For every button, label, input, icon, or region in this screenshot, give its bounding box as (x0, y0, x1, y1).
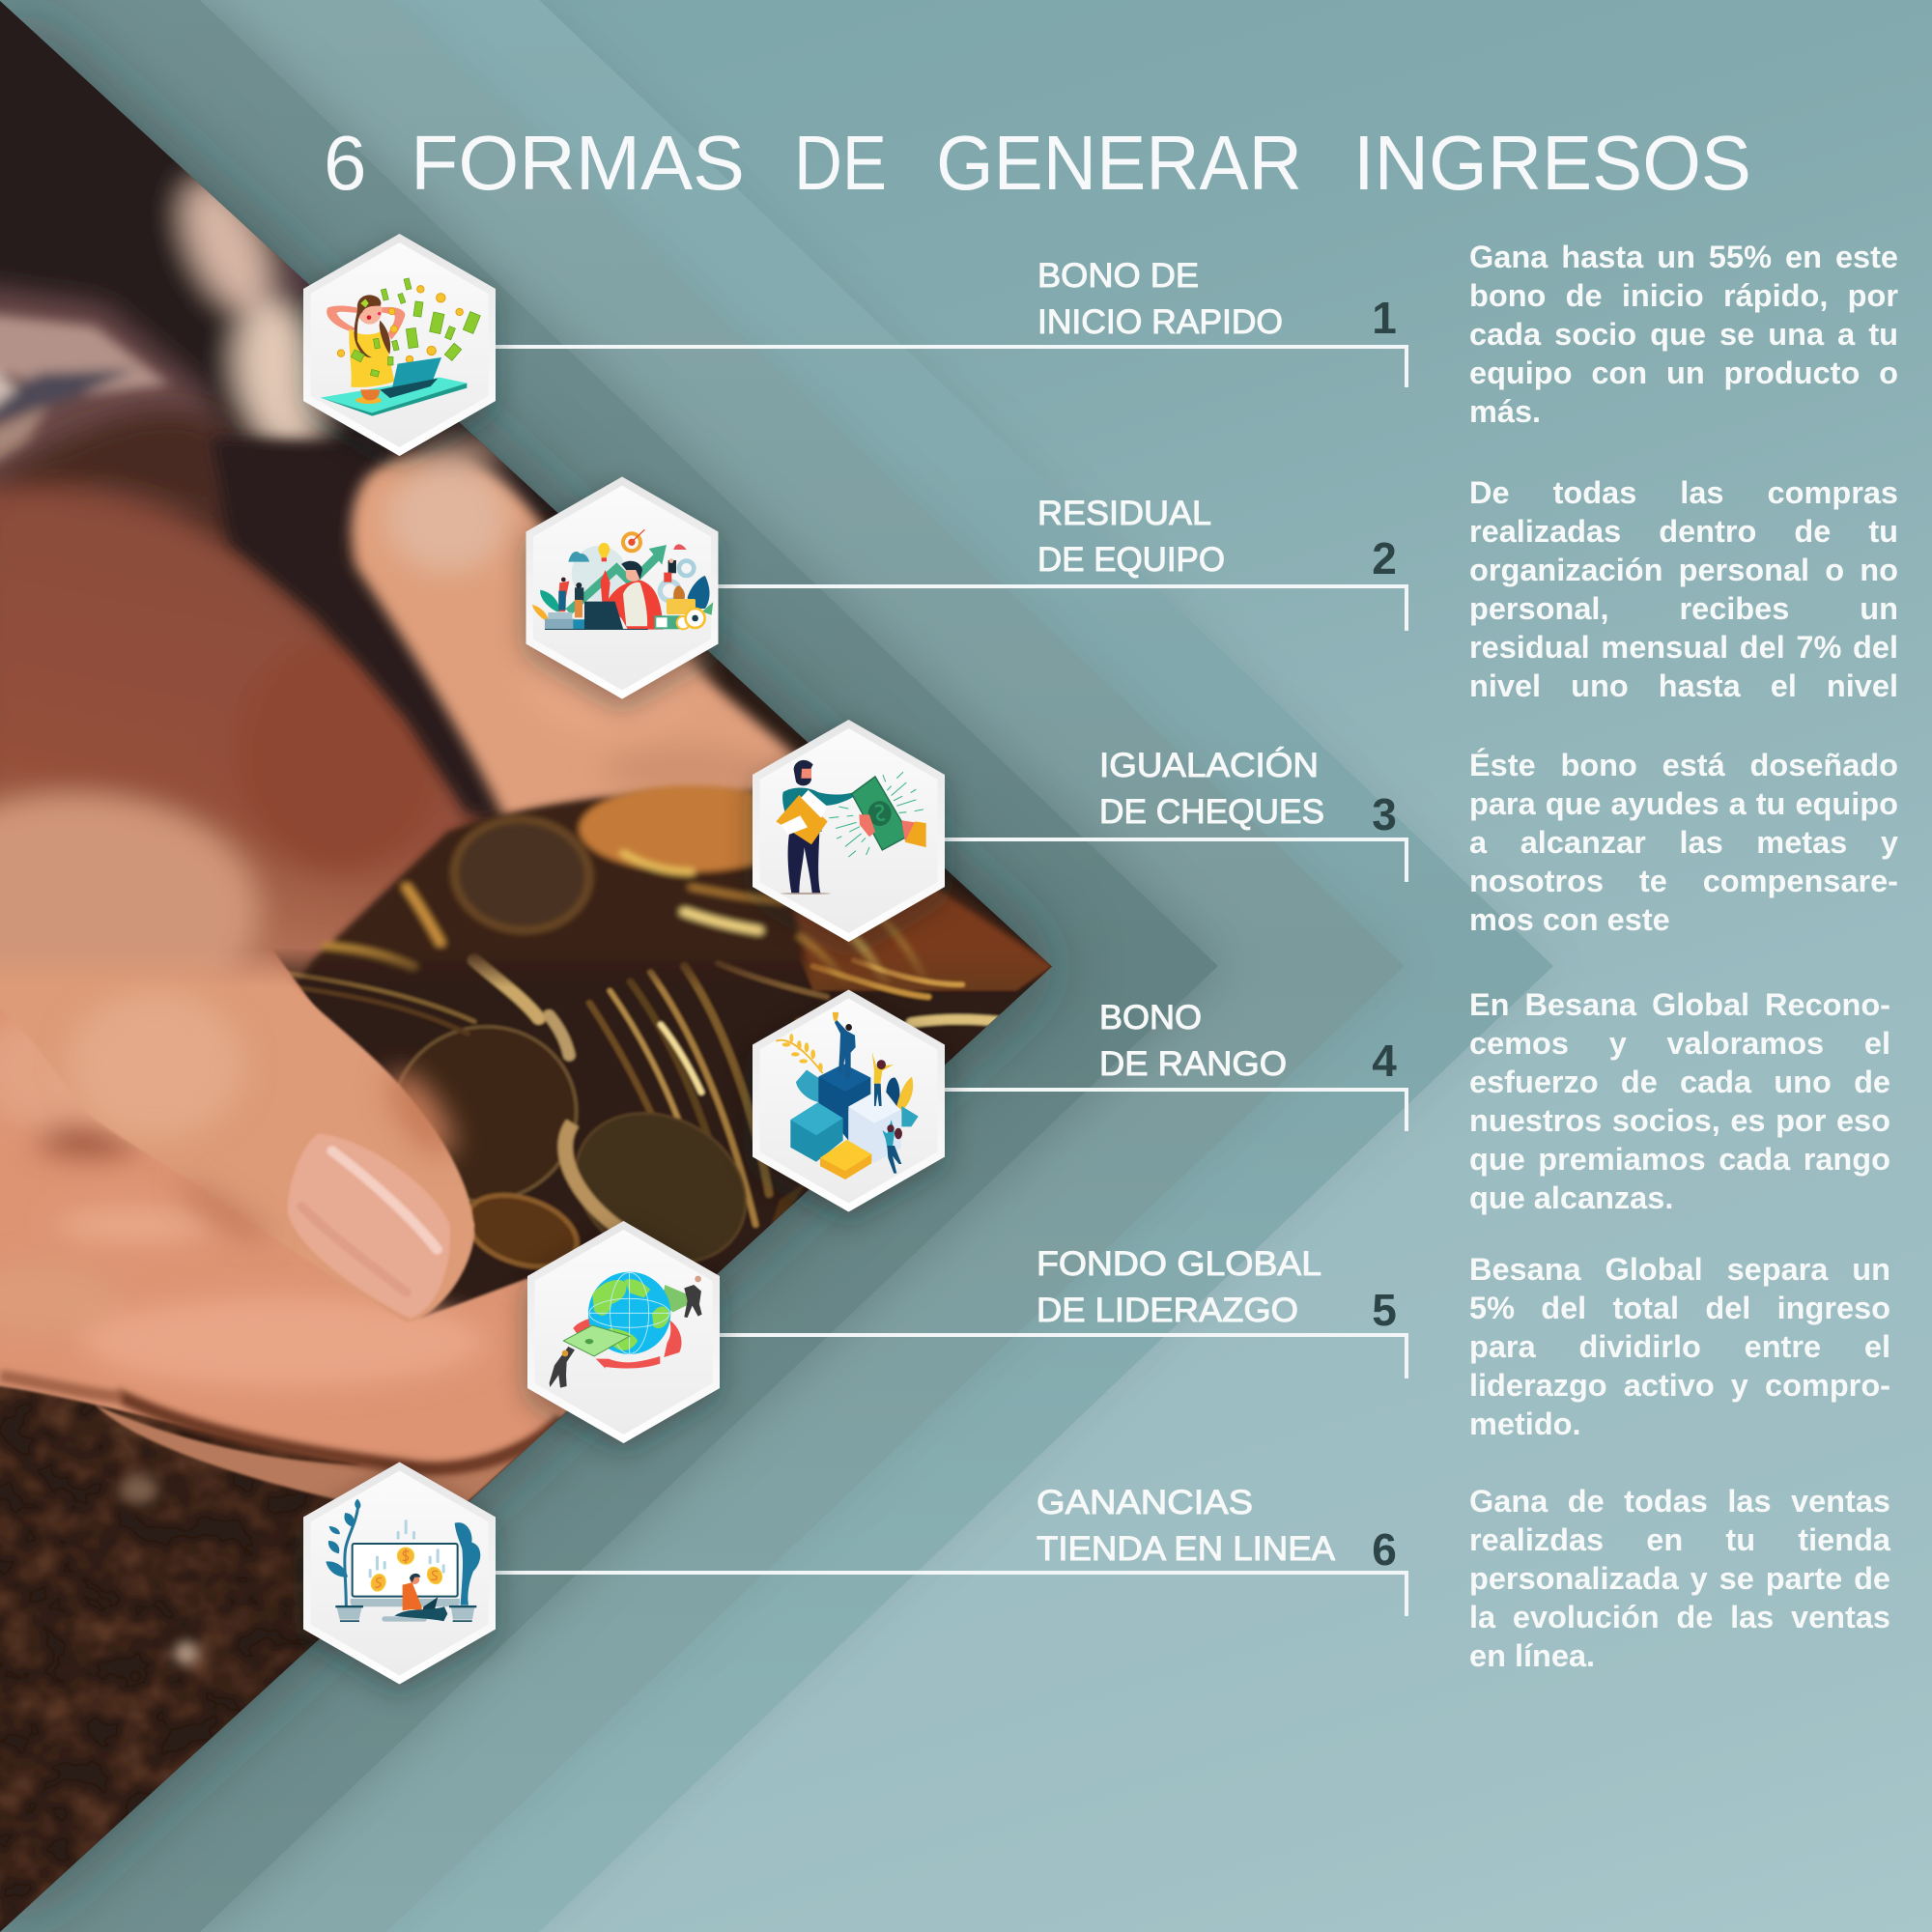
heading 5: FONDO GLOBAL (1037, 1245, 1321, 1283)
text: description 4: que alcanzas. (1469, 1180, 1673, 1215)
connector 2 (718, 586, 1406, 631)
text: description 4: cemos y valoramos el (1469, 1026, 1890, 1061)
text: description 1: equipo con un producto o (1469, 355, 1898, 390)
hexagon 4 (753, 989, 945, 1211)
number 6: 6 (1372, 1524, 1397, 1575)
title: DE (794, 120, 887, 206)
text: description 4: nuestros socios, es por eso (1469, 1103, 1890, 1138)
chevron band 1 (0, 0, 1218, 1932)
photo: hand holding coins (0, 0, 1152, 1932)
heading 4: BONO (1099, 999, 1202, 1037)
text: description 2: De todas las compras (1469, 475, 1898, 510)
connector 3 (945, 839, 1406, 882)
number 3: 3 (1372, 789, 1397, 839)
connector 6 (496, 1573, 1406, 1616)
text: description 6 (1469, 1484, 1891, 1673)
soil (0, 1385, 564, 1927)
text: description 4: que premiamos cada rango (1469, 1142, 1890, 1177)
icon: man handing over banknote (776, 760, 926, 895)
connector 1 (496, 347, 1406, 387)
connector 5 (720, 1335, 1406, 1378)
text: description 6: personalizada y se parte de (1469, 1561, 1890, 1596)
icon: podium with climbers (776, 1012, 919, 1179)
text: description 4: En Besana Global Recono- (1469, 987, 1890, 1022)
hexagon 3 (753, 720, 945, 942)
text: description 6: Gana de todas las ventas (1469, 1484, 1890, 1519)
text: description 2: residual mensual del 7% del (1469, 630, 1898, 665)
photo: top coins blurred (298, 782, 1052, 1045)
text: description 1: cada socio que se una a tu (1469, 317, 1898, 352)
text: description 2: nivel uno hasta el nivel (1469, 668, 1898, 703)
text: description 3 (1469, 748, 1898, 937)
icon: globe and money flow (550, 1272, 702, 1388)
text: description 3: para que ayudes a tu equipo (1469, 786, 1898, 821)
icon: woman with money and laptop (321, 278, 480, 416)
text: description 3: Éste bono está doseñado (1469, 748, 1898, 782)
text: description 3: nosotros te compensare- (1469, 864, 1898, 898)
text: description 4: esfuerzo de cada uno de (1469, 1065, 1890, 1099)
number 5: 5 (1372, 1285, 1397, 1335)
heading 2: RESIDUAL (1037, 495, 1211, 532)
connector lines (496, 347, 1406, 1616)
text: description 5: 5% del total del ingreso (1469, 1291, 1890, 1325)
number 4: 4 (1372, 1036, 1397, 1086)
chevron band 2 (0, 0, 1405, 1932)
heading 2: DE EQUIPO (1037, 541, 1225, 579)
text: description 5: metido. (1469, 1406, 1581, 1441)
hexagon 6 (303, 1463, 496, 1685)
text: description 1: más. (1469, 394, 1541, 429)
text: description 2: realizadas dentro de tu (1469, 514, 1898, 549)
text: description 2 (1469, 475, 1898, 703)
hexagon 5 (527, 1221, 720, 1443)
heading 3: DE CHEQUES (1099, 793, 1324, 831)
icon: team growth and man at laptop (532, 529, 713, 630)
blurred finger (351, 453, 807, 819)
text: description 1: Gana hasta un 55% en este (1469, 240, 1898, 274)
title: FORMAS (411, 120, 745, 206)
hexagon 2 (526, 477, 719, 699)
thumbnail (287, 1133, 450, 1319)
heading 1: INICIO RAPIDO (1037, 303, 1283, 341)
photo lower half: coins and fingers (0, 941, 1084, 1927)
text: description 6: realizdas en tu tienda (1469, 1522, 1890, 1557)
text: description 5: liderazgo activo y compro- (1469, 1368, 1890, 1403)
dark crease between hand and fingers (210, 438, 501, 813)
heading 6: GANANCIAS (1037, 1484, 1253, 1521)
text: description 6: la evolución de las ventas (1469, 1600, 1890, 1634)
title: GENERAR (936, 120, 1302, 206)
hexagon 1 (303, 234, 496, 456)
coin pile (274, 951, 1052, 1274)
text: description 5: para dividirlo entre el (1469, 1329, 1890, 1364)
heading 5: DE LIDERAZGO (1037, 1292, 1298, 1329)
text: description 6: en línea. (1469, 1638, 1595, 1673)
photo upper half: blurred wrist and hand (0, 0, 1152, 1047)
text: description 3: a alcanzar las metas y (1469, 825, 1898, 860)
text: description 3: mos con este (1469, 902, 1670, 937)
number 2: 2 (1372, 533, 1397, 583)
number 1: 1 (1372, 293, 1397, 343)
heading 1: BONO DE (1037, 257, 1199, 295)
icon: man with laptop and falling coins (326, 1499, 480, 1622)
text: description 1 (1469, 240, 1898, 429)
title: INGRESOS (1353, 120, 1751, 206)
connector 4 (945, 1090, 1406, 1131)
heading 6: TIENDA EN LINEA (1037, 1530, 1336, 1568)
title: 6 (324, 120, 367, 206)
text: description 1: bono de inicio rápido, por (1469, 278, 1898, 313)
text: description 5 (1469, 1252, 1890, 1441)
text: description 5: Besana Global separa un (1469, 1252, 1890, 1287)
heading 3: IGUALACIÓN (1099, 747, 1319, 784)
fingers (0, 948, 576, 1503)
text: description 2: personal, recibes un (1469, 591, 1898, 626)
text: description 4 (1469, 987, 1890, 1215)
text: description 2: organización personal o no (1469, 553, 1898, 587)
heading 4: DE RANGO (1099, 1045, 1287, 1083)
